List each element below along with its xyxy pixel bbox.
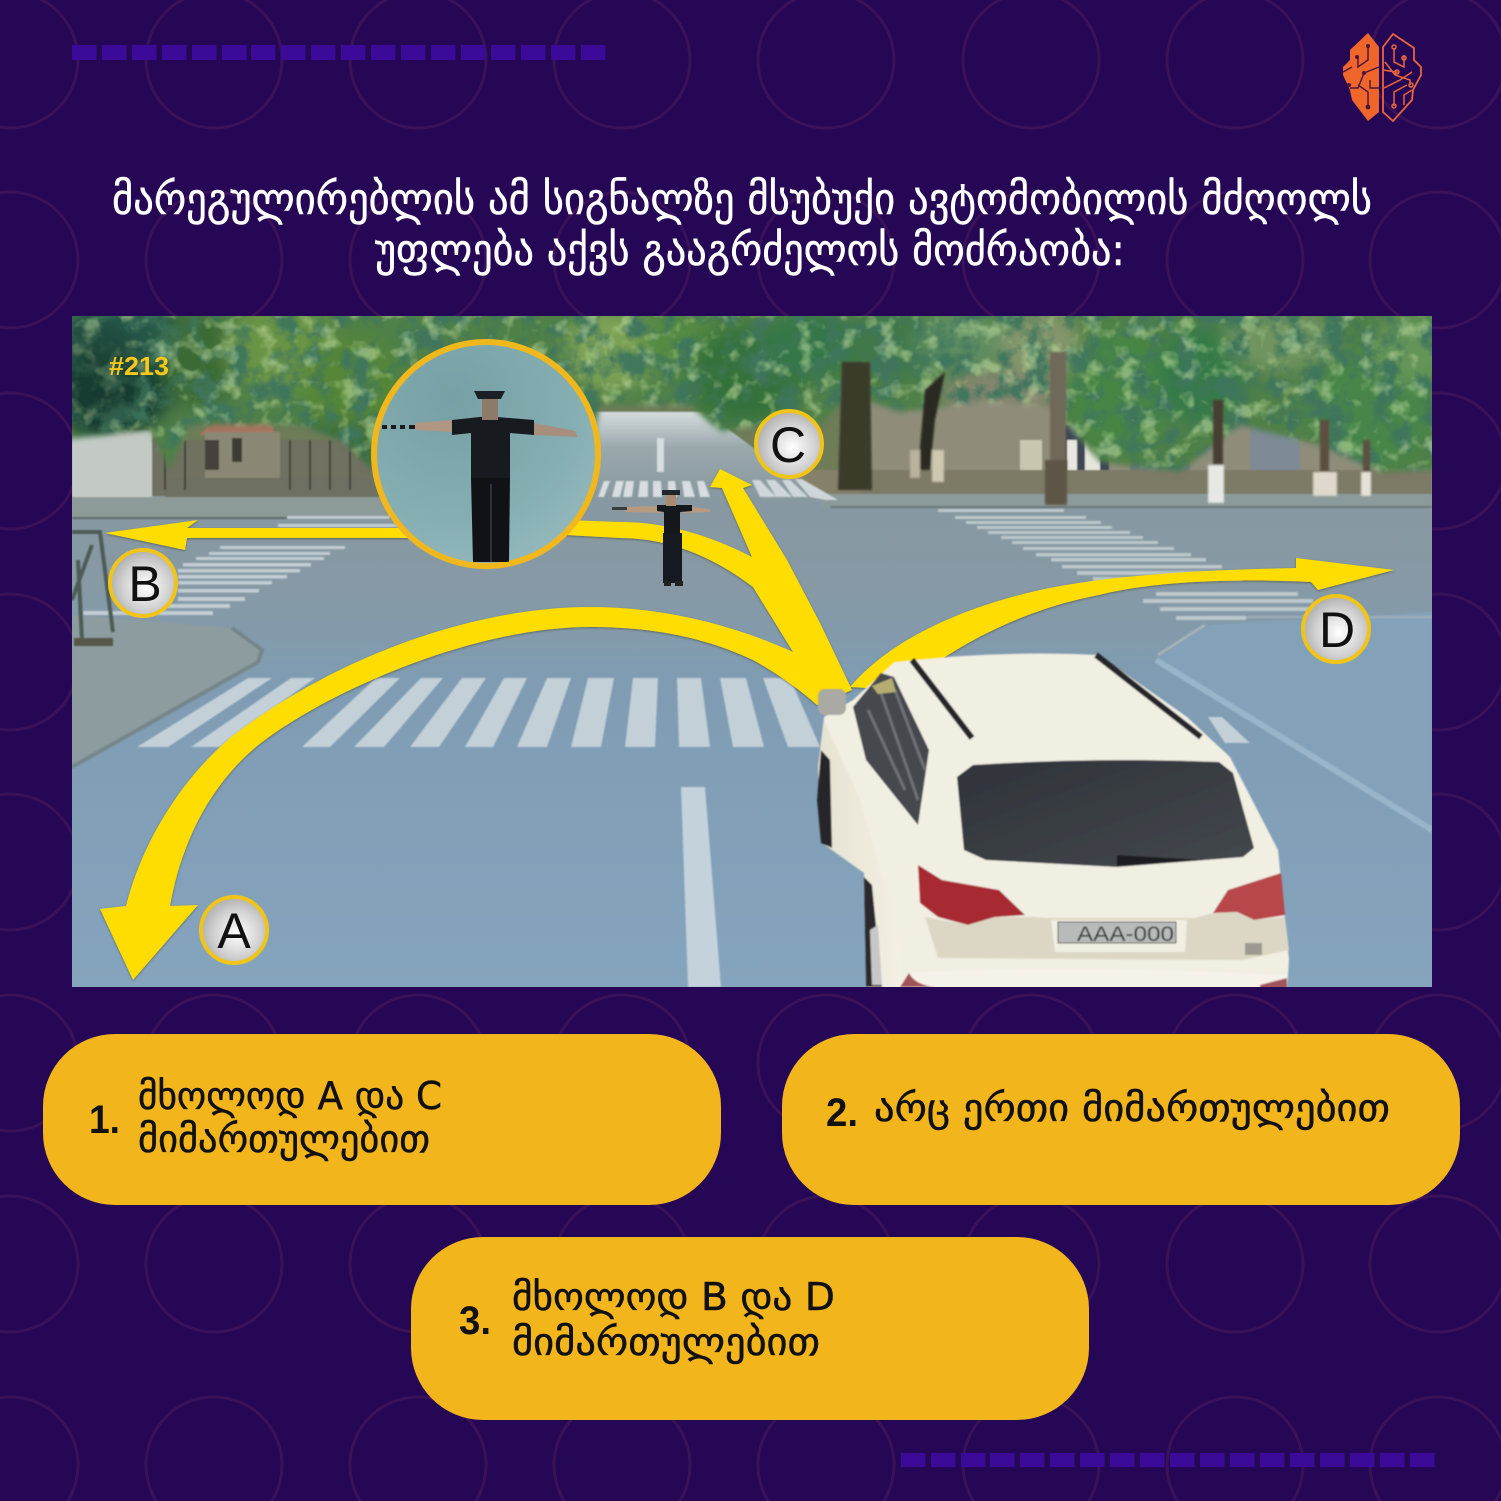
road markings: far crosswalk and center line [598, 438, 838, 500]
badge: D: D [1319, 602, 1355, 658]
rear window [957, 760, 1254, 867]
photo: intersection scene [40, 300, 1450, 990]
officer figure [382, 391, 578, 562]
left fence [72, 532, 113, 642]
road markings: front crosswalk [137, 678, 1250, 747]
scenery: buildings, ground and sidewalks [72, 400, 1432, 832]
answer option 1: 1. [89, 1098, 120, 1142]
trees: trunks [838, 352, 1371, 505]
left corner sidewalk [72, 615, 262, 767]
road markings: left crosswalk [83, 516, 398, 615]
left taillight [918, 865, 1025, 925]
trees: foliage canopy [72, 316, 1432, 474]
badge: C: C [770, 417, 806, 473]
traffic officer small [612, 490, 710, 586]
car body [818, 654, 1289, 990]
license plate: AAA-000 [1077, 923, 1174, 946]
arrow D [850, 558, 1394, 690]
right corner sidewalk [1160, 612, 1432, 682]
answer option 3: მიმართულებით [512, 1320, 820, 1364]
license plate [1058, 922, 1176, 946]
rear wheel [864, 877, 882, 987]
bumper [909, 969, 1287, 990]
right taillight [1213, 873, 1285, 920]
road markings: right crosswalk [938, 509, 1313, 620]
side shading [818, 722, 867, 986]
roof rails [912, 660, 972, 738]
answer option 2 [782, 1034, 1460, 1205]
badge: B: B [128, 556, 162, 612]
far road [593, 410, 827, 496]
answer option 1: მხოლოდ A და C [138, 1074, 442, 1118]
arrow A [100, 607, 850, 980]
top dashed bar [72, 45, 606, 60]
badge: D [1303, 596, 1369, 662]
arrows: yellow direction arrows [100, 469, 1394, 980]
answer option 3: 3. [459, 1299, 491, 1343]
badge: B [110, 550, 176, 616]
answer option 3 [411, 1237, 1089, 1420]
answer option 2: არც ერთი მიმართულებით [874, 1086, 1390, 1130]
title [112, 174, 1372, 276]
road markings: center dashed line [681, 787, 721, 987]
title: მარეგულირებლის ამ სიგნალზე მსუბუქი ავტომობილის მძღოლს [112, 174, 1372, 225]
model badge [1245, 943, 1262, 955]
badge: C [756, 411, 822, 477]
bottom dashed bar [901, 1453, 1434, 1467]
title: უფლება აქვს გააგრძელოს მოძრაობა: [375, 225, 1125, 276]
plate recess [1051, 920, 1187, 952]
car: white SUV [817, 654, 1289, 990]
answer option 2: 2. [826, 1091, 858, 1135]
answer option 1: მიმართულებით [138, 1117, 430, 1161]
far sidewalks [72, 496, 388, 516]
mirror [818, 689, 846, 715]
question number: #213 [109, 351, 169, 381]
inset circle: officer close-up [374, 342, 598, 566]
front wheel [817, 750, 832, 848]
side windows [853, 673, 929, 825]
badge: A [201, 897, 267, 963]
answer option 1 [43, 1034, 721, 1205]
tailgate lower [925, 912, 1289, 960]
road surface [72, 434, 1432, 987]
icon: brain logo [1343, 33, 1421, 121]
arrow B [565, 520, 765, 600]
badge: A: A [217, 903, 251, 959]
answer option 3: მხოლოდ B და D [512, 1275, 835, 1319]
arrow C [710, 469, 852, 705]
